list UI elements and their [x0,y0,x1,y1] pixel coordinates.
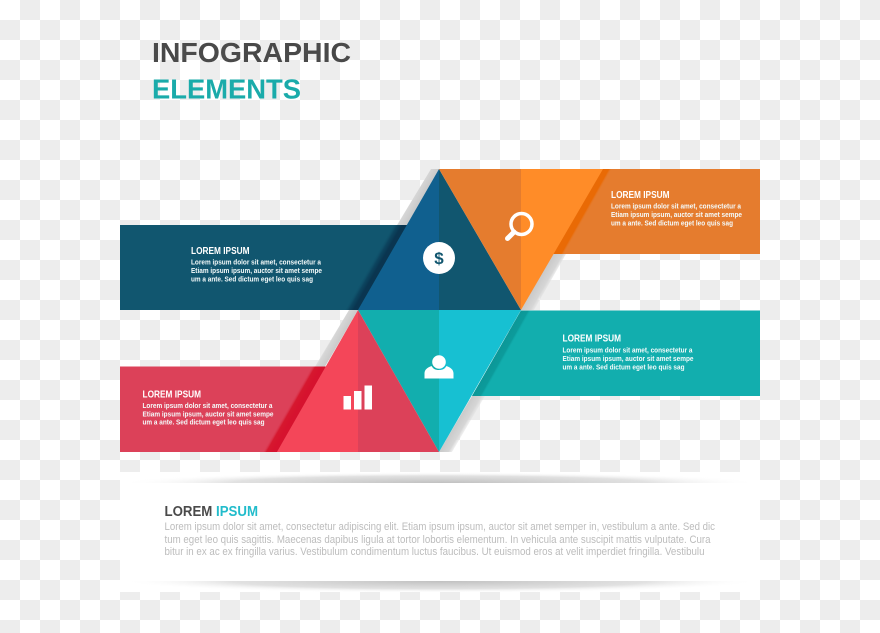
text: red band: um a ante. Sed dictum eget leo quis sag [142,418,264,427]
text: body paragraph: tum eget leo quis sagittis. Maecenas dapibus ligula at tortor lobortis elementum. In vehicula ante suscipit mattis vulputate. Cura [164,534,711,546]
icon: dollar: $ [434,249,444,268]
text: red band [142,390,274,427]
title: ELEMENTS [152,74,301,104]
text: orange band: LOREM IPSUM [611,190,670,201]
triangle: blue [358,169,521,310]
text: orange band: Lorem ipsum dolor sit amet, consectetur a [611,202,742,211]
text: red band: LOREM IPSUM [142,390,201,401]
text: orange band [611,190,742,228]
text: orange band: Etiam ipsum ipsum, auctor sit amet sempe [611,210,742,219]
triangle: orange [439,169,603,310]
triangle: teal [358,310,521,452]
text: dark blue band: Lorem ipsum dolor sit amet, consectetur a [191,258,322,266]
triangle: red [277,310,439,452]
title [152,37,351,104]
icon: person [424,355,454,378]
icon: dollar [423,242,455,274]
panel: orange band [521,169,760,310]
panel: dark blue band [120,169,439,310]
icon: magnifier [508,214,532,238]
panel: teal band [439,310,760,452]
text: orange band: um a ante. Sed dictum eget leo quis sag [611,219,733,228]
icon: bars [344,386,372,410]
text: teal band: um a ante. Sed dictum eget leo quis sag [562,362,684,372]
text: teal band: Lorem ipsum dolor sit amet, consectetur a [562,346,693,355]
text: dark blue band [191,246,322,284]
text: teal band: LOREM IPSUM [562,334,621,345]
title: INFOGRAPHIC [152,37,351,68]
text: dark blue band: Etiam ipsum ipsum, auctor sit amet sempe [191,266,322,275]
text: body paragraph: bitur in ex ac ex fringilla varius. Vestibulum condimentum luctus faucibus. Ut euismod eros at velit imperdiet fringilla. Vestibulu [164,546,704,558]
panel: red band [120,310,358,452]
text: body paragraph [164,521,715,558]
text: teal band: Etiam ipsum ipsum, auctor sit amet sempe [562,354,694,363]
text: red band: Etiam ipsum ipsum, auctor sit amet sempe [142,409,274,418]
text: body paragraph: Lorem ipsum dolor sit amet, consectetur adipiscing elit. Etiam ipsum ipsum, auctor sit amet semper in, vestibulum a ante. Sed dic [164,521,715,533]
heading: lorem ipsum: LOREM IPSUM [164,504,258,520]
text: red band: Lorem ipsum dolor sit amet, consectetur a [142,401,273,410]
text: dark blue band: LOREM IPSUM [191,246,250,257]
panel: bottom text [120,472,760,593]
text: dark blue band: um a ante. Sed dictum eget leo quis sag [191,274,313,284]
text: teal band [562,334,694,372]
